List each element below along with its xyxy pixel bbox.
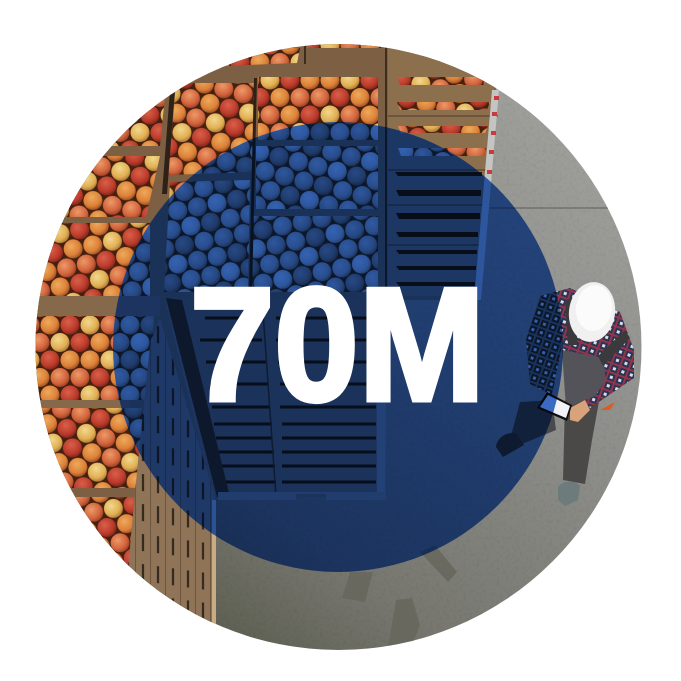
- pallet stack: centre: [165, 298, 387, 500]
- infographic: [36, 44, 642, 650]
- worker: [496, 279, 634, 506]
- apple crates: left column: [30, 96, 165, 590]
- phone: [537, 392, 572, 421]
- wood crate side: [125, 318, 216, 628]
- hand: [570, 400, 590, 422]
- overalls: [562, 350, 606, 408]
- crate base: [30, 40, 500, 625]
- hard hat: [568, 282, 616, 342]
- blue overlay circle: [113, 122, 563, 572]
- shirt: [526, 288, 634, 408]
- headline figure: 70M: [190, 255, 485, 435]
- slatted crate stack: right: [388, 40, 499, 300]
- apple crates: middle columns: [162, 40, 387, 300]
- legs and boots: [510, 400, 556, 444]
